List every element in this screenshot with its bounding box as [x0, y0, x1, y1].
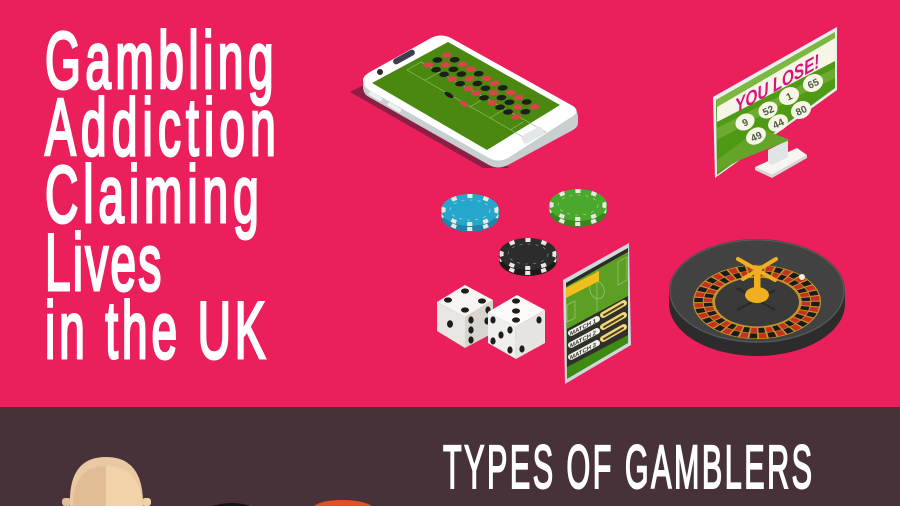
icon: right die [488, 295, 545, 359]
title: Claiming [45, 148, 259, 239]
title: Gambling [45, 14, 274, 105]
number ring [693, 265, 821, 339]
icon: blue casino chip [441, 194, 499, 232]
icon: tablet with football betting: MATCH 2 [570, 329, 596, 350]
icon: tablet with football betting: MATCH 3 [570, 341, 596, 362]
icon: left die [437, 285, 493, 348]
figure: dark haired head [212, 503, 250, 506]
title: in the UK [45, 284, 266, 375]
icon: black casino chip [499, 238, 557, 276]
match rows [571, 303, 624, 357]
lottery balls: 1 [785, 91, 795, 104]
title [45, 14, 276, 375]
lottery balls: 80 [794, 104, 809, 119]
lottery balls: 65 [806, 77, 821, 92]
monitor stand [755, 140, 807, 178]
lottery balls: 52 [761, 104, 776, 119]
monitor screen [713, 27, 837, 178]
lottery balls: 44 [771, 117, 786, 132]
ball [799, 274, 805, 280]
icon: tablet with football betting [563, 243, 631, 384]
pitch markings [567, 257, 627, 322]
figure: orange haired head [314, 500, 372, 506]
icon: green casino chip [549, 189, 607, 227]
title: Lives [45, 216, 161, 307]
lottery balls [732, 70, 826, 148]
lottery balls: 9 [741, 117, 751, 130]
icon: monitor showing you lose [713, 27, 837, 178]
panel: dark lower section background [0, 407, 900, 506]
icon: tablet with football betting: MATCH 1 [570, 317, 596, 338]
spindle [737, 259, 776, 310]
icon: roulette wheel [669, 239, 845, 356]
you lose banner text: YOU LOSE! [734, 50, 821, 118]
figure: bald man head [62, 457, 151, 506]
lottery balls: 49 [749, 130, 764, 145]
title: Addiction [45, 81, 276, 172]
icon: smartphone with roulette table [350, 36, 578, 168]
heading: types of gamblers: TYPES OF GAMBLERS [443, 434, 812, 502]
